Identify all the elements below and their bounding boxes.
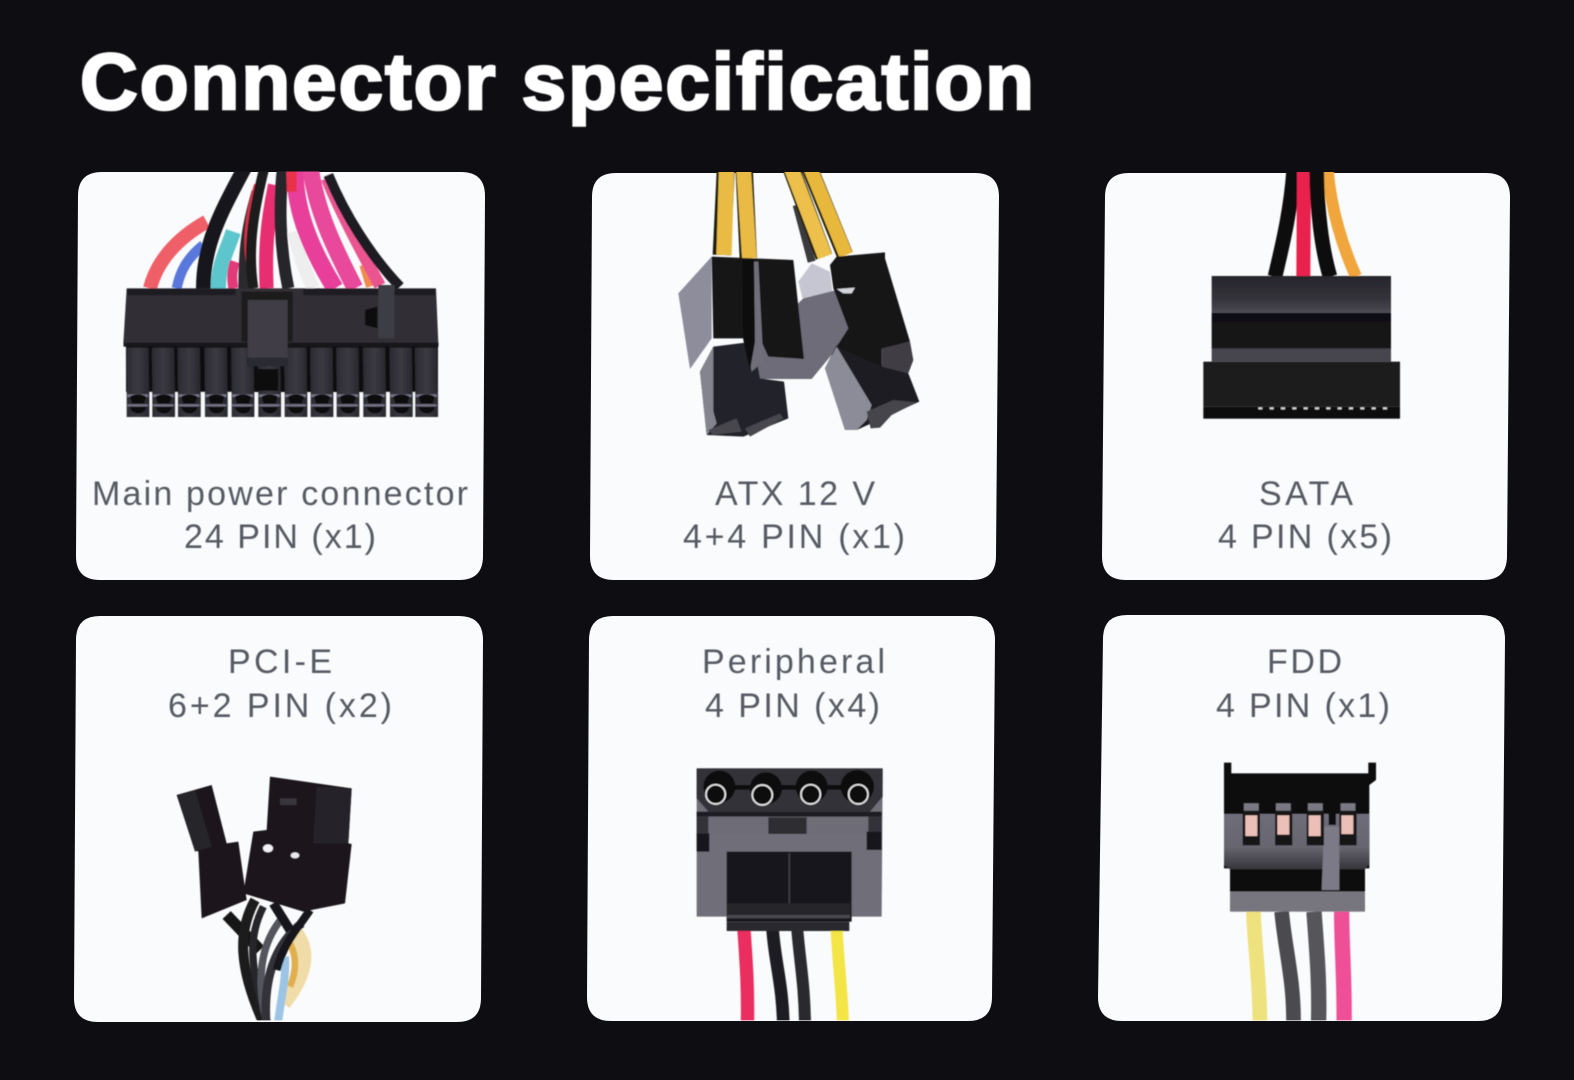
panel: SATA xyxy=(1102,165,1510,580)
icon: FDD 4 pin connector xyxy=(1224,763,1376,1030)
title: Connector specification xyxy=(80,37,1034,126)
icon: 24 pin connector xyxy=(123,165,438,417)
caption: peripheral: 4 PIN (x4) xyxy=(705,687,880,725)
caption: SATA xyxy=(1218,475,1392,556)
caption: ATX 12 V: ATX 12 V xyxy=(715,475,875,513)
caption: FDD: FDD xyxy=(1267,643,1342,681)
caption: peripheral xyxy=(702,643,885,725)
icon: ATX 4+4 pin connector xyxy=(678,165,919,437)
caption: PCI-E xyxy=(168,643,392,725)
panel: ATX 12V xyxy=(590,165,999,580)
panel: PCI-E xyxy=(74,616,483,1030)
caption: main power connector: 24 PIN (x1) xyxy=(184,518,376,556)
panel: peripheral xyxy=(587,616,995,1030)
icon: peripheral 4 pin connector xyxy=(697,768,883,1030)
caption: SATA: SATA xyxy=(1259,475,1353,513)
caption: main power connector xyxy=(92,475,468,556)
icon: SATA connector xyxy=(1203,165,1400,419)
caption: main power connector: Main power connector xyxy=(92,475,468,513)
caption: ATX 12 V: 4+4 PIN (x1) xyxy=(683,518,905,556)
caption: FDD: 4 PIN (x1) xyxy=(1216,687,1390,725)
panel: main power connector xyxy=(76,165,485,580)
panel: FDD xyxy=(1098,615,1505,1030)
caption: FDD xyxy=(1216,643,1390,725)
caption: peripheral: Peripheral xyxy=(702,643,885,681)
caption: PCI-E: PCI-E xyxy=(228,643,332,681)
caption: SATA: 4 PIN (x5) xyxy=(1218,518,1392,556)
icon: PCI-E 6+2 pin connector xyxy=(177,777,352,1030)
caption: PCI-E: 6+2 PIN (x2) xyxy=(168,687,392,725)
caption: ATX 12 V xyxy=(683,475,905,556)
